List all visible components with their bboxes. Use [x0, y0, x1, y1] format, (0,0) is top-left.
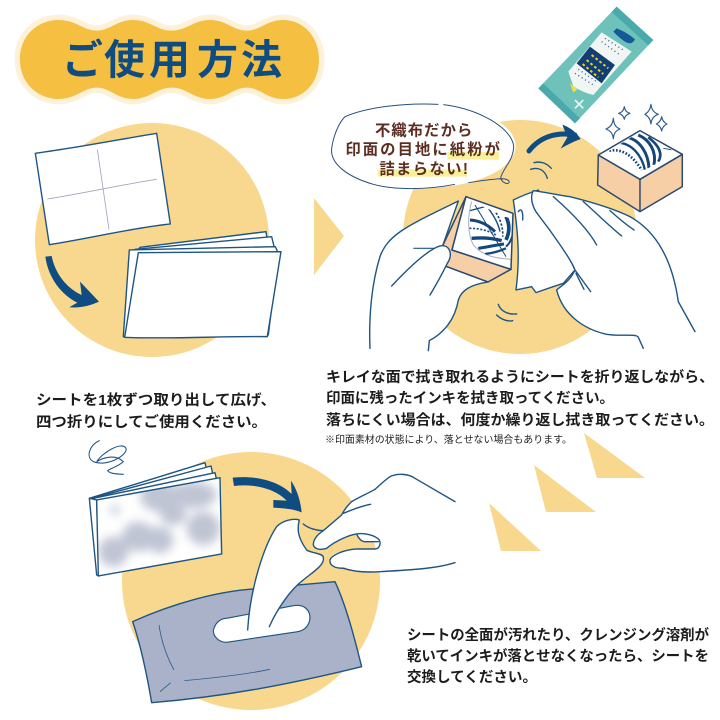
icon: folded sheet: [123, 232, 281, 338]
icon: unfolded sheet: [35, 133, 170, 245]
text: step 1 instructions: 四つ折りにしてご使用ください。: [36, 413, 267, 431]
icon: cleaning cloth: [513, 190, 575, 293]
icon: wet wipe package: [538, 7, 653, 123]
icon: scribble mark: [89, 441, 126, 474]
arrow: unfold to folded: [45, 256, 99, 308]
panel: step 3 circle: [122, 452, 380, 710]
arrow: to tissue: [233, 477, 302, 512]
text: step 3 instructions: 交換してください。: [407, 668, 537, 686]
text: step 1 instructions: シートを1枚ずつ取り出して広げ、: [36, 391, 276, 409]
text: step 2 instructions: [325, 368, 714, 446]
title banner: ご使用方法: [62, 37, 282, 83]
arrow: step 1 to step 2: [314, 198, 344, 275]
panel: step 2 circle: [403, 120, 637, 354]
title banner: [20, 20, 319, 99]
icon: dirty stamp block: [413, 197, 513, 282]
callout: speech bubble: 印面の目地に紙粉が: [345, 141, 501, 159]
icon: left thumb: [392, 246, 450, 310]
text: step 3 instructions: 乾いてインキが落とせなくなったら、シートを: [407, 647, 709, 665]
panel: step 1 circle: [35, 123, 269, 357]
callout: speech bubble: 詰まらない!: [379, 161, 468, 178]
text: step 1 instructions: [36, 391, 276, 431]
text: step 2 instructions: 落ちにくい場合は、何度か繰り返し拭き取ってください。: [326, 411, 714, 429]
arrow: toward clean block: [529, 125, 581, 151]
text: step 3 instructions: [407, 626, 709, 686]
callout: speech bubble: [331, 104, 516, 189]
text: step 2 instructions: 印面に残ったインキを拭き取ってください。: [326, 389, 614, 407]
icon: tissue sheet: [248, 519, 323, 630]
icon: clean stamp block: [598, 131, 682, 212]
icon: hand holding block: [370, 201, 488, 351]
icon: sparkles: [606, 104, 667, 139]
icon: pinching hand: [303, 474, 455, 572]
text: step 2 instructions: キレイな面で拭き取れるようにシートを折り返しながら、: [326, 368, 714, 386]
icon: right hand: [518, 191, 695, 348]
text: step 3 instructions: シートの全面が汚れたり、クレンジング溶剤が: [407, 626, 709, 644]
panel: step 3 illustration: [89, 441, 455, 703]
icon: motion marks: [497, 162, 551, 321]
icon: tissue box: [133, 582, 362, 703]
panel: step 2 illustration: [331, 7, 695, 351]
arrow: step 2 to step 3: [489, 433, 645, 551]
note: ※印面素材の状態により、落とせない場合もあります。: [325, 433, 572, 446]
icon: soiled folded sheet: [89, 463, 222, 576]
panel: step 1 illustration: [35, 133, 281, 338]
callout: speech bubble: 不織布だから: [375, 121, 472, 139]
